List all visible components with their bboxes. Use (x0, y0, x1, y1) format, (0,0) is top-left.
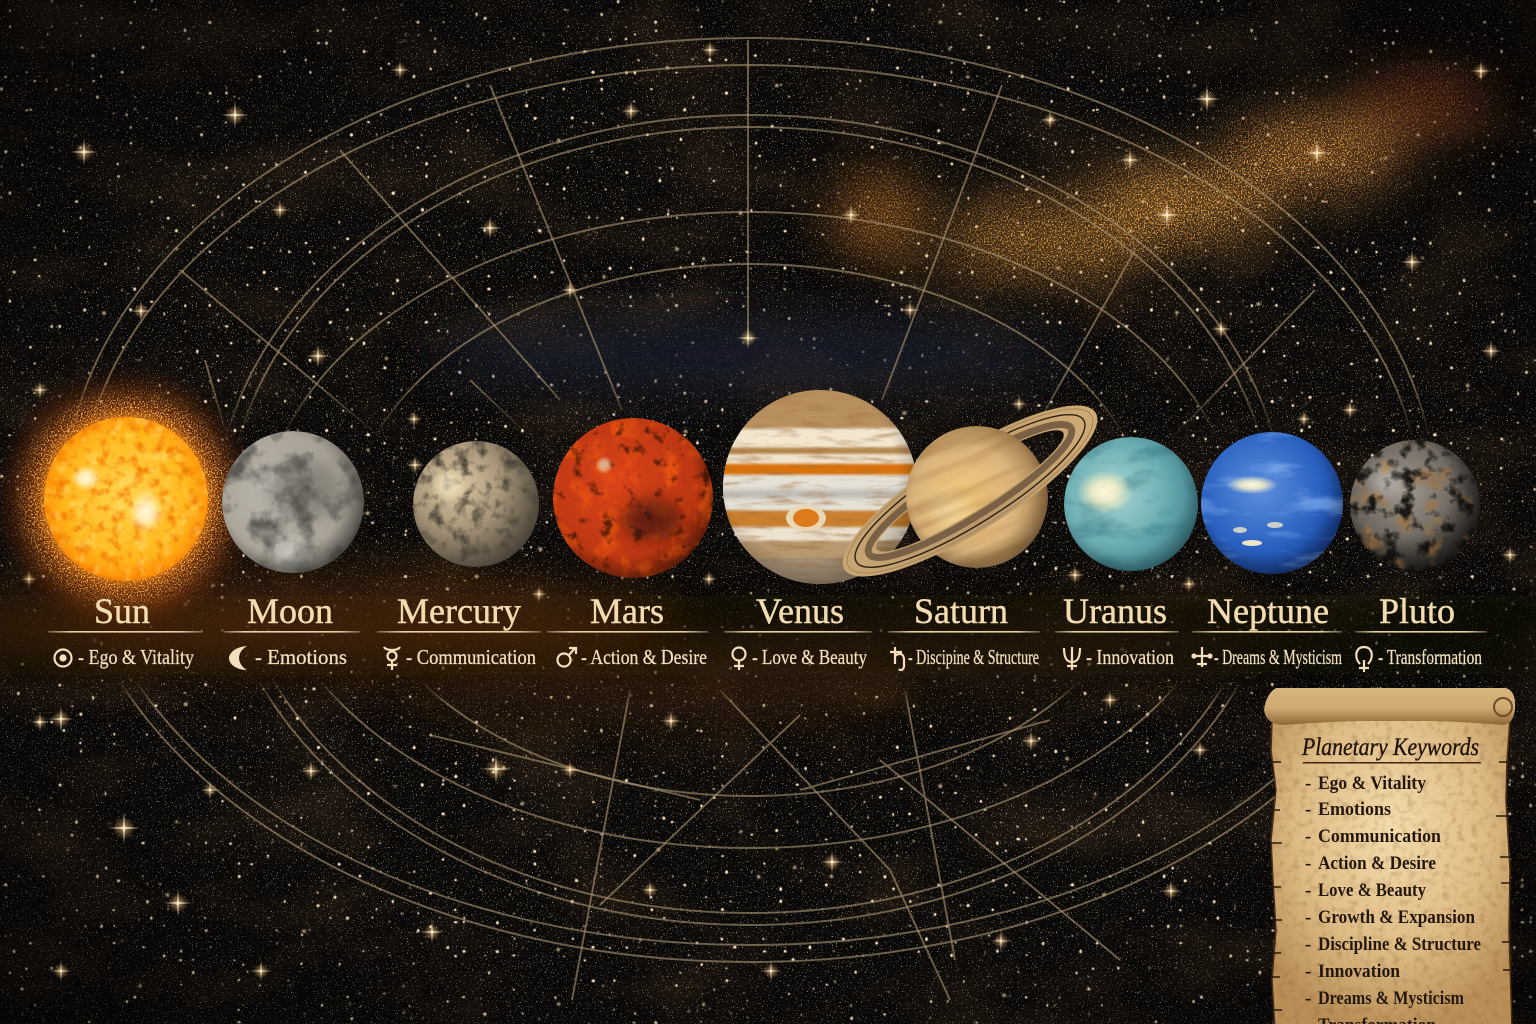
icon: Neptune symbol (1192, 647, 1212, 667)
label: Uranus: - Innovation (1086, 645, 1174, 669)
label: Moon: - Emotions (255, 645, 347, 669)
label: Saturn: Saturn (914, 591, 1008, 631)
planet: Sun (0, 370, 244, 624)
label: Neptune: Neptune (1207, 591, 1329, 631)
label: Mars: Mars (590, 591, 664, 631)
label: Mars: - Action & Desire (581, 645, 707, 669)
keyword list: Communication (1318, 826, 1441, 847)
label: Neptune: - Dreams & Mysticism (1214, 645, 1342, 669)
label: Saturn (888, 591, 1040, 670)
label: Pluto: Pluto (1379, 591, 1455, 631)
label: Sun (48, 591, 203, 669)
icon: sun symbol (54, 650, 72, 666)
keyword list: Discipline & Structure (1318, 934, 1481, 955)
label: Uranus (1055, 591, 1179, 670)
icon: Saturn symbol (890, 647, 904, 670)
planet: Mars (553, 418, 713, 578)
label: Venus: - Love & Beauty (752, 645, 867, 669)
keyword list: - (1305, 853, 1311, 874)
keyword list: - (1305, 799, 1311, 820)
keyword list: - (1305, 961, 1311, 982)
planet: Mercury (413, 441, 539, 567)
label: Sun: Sun (94, 591, 150, 631)
keyword list: Love & Beauty (1318, 880, 1426, 901)
label: Pluto (1355, 591, 1487, 672)
planet: Neptune (1201, 432, 1343, 574)
label: Uranus: Uranus (1063, 591, 1167, 631)
keyword list: - (1305, 773, 1311, 794)
icon: Pluto symbol (1356, 647, 1372, 672)
keyword list: Action & Desire (1318, 853, 1436, 874)
parchment scroll: planetary keywords (1264, 688, 1515, 1024)
label: Mars (547, 591, 708, 669)
scroll title: Planetary Keywords (1301, 734, 1479, 761)
label: Venus (724, 591, 872, 670)
scroll roll (1264, 688, 1515, 725)
label: Venus: Venus (756, 591, 844, 631)
back of rings (823, 379, 1117, 603)
keyword list: Emotions (1318, 799, 1391, 820)
label: Saturn: - Discipine & Structure (908, 645, 1039, 669)
label: Moon (224, 591, 360, 670)
keyword list: - (1305, 988, 1311, 1009)
label: Pluto: - Transformation (1378, 645, 1482, 669)
label: Moon: Moon (247, 591, 333, 631)
planet: Pluto (1350, 440, 1480, 570)
keyword list: - (1305, 934, 1311, 955)
keyword list: - (1305, 880, 1311, 901)
label: Sun: - Ego & Vitality (78, 645, 194, 669)
scroll paper (1270, 720, 1512, 1024)
icon: crescent moon (229, 646, 247, 670)
keyword list: Ego & Vitality (1318, 773, 1426, 794)
icon: Mercury symbol (384, 647, 400, 670)
planet: Jupiter (720, 390, 920, 588)
front of rings (844, 412, 1098, 576)
milky way band (800, 60, 1536, 330)
label: Mercury (377, 591, 541, 670)
icon: Mars symbol (558, 648, 576, 666)
planet: Moon (222, 431, 364, 579)
keyword list: - (1305, 826, 1311, 847)
icon: trident symbol (1064, 647, 1080, 670)
keyword list: Growth & Expansion (1318, 907, 1475, 928)
label: Mercury: Mercury (397, 591, 521, 631)
Saturn body (906, 426, 1048, 568)
keyword list: - (1305, 907, 1311, 928)
icon: Venus symbol (732, 648, 746, 670)
keyword list (1305, 773, 1481, 1024)
keyword list: Innovation (1318, 961, 1400, 982)
label: Mercury: - Communication (406, 645, 536, 669)
keyword list: Dreams & Mysticism (1318, 988, 1464, 1009)
planet: Saturn (842, 406, 1098, 576)
planet: Uranus (1064, 437, 1198, 571)
label: Neptune (1192, 591, 1342, 669)
